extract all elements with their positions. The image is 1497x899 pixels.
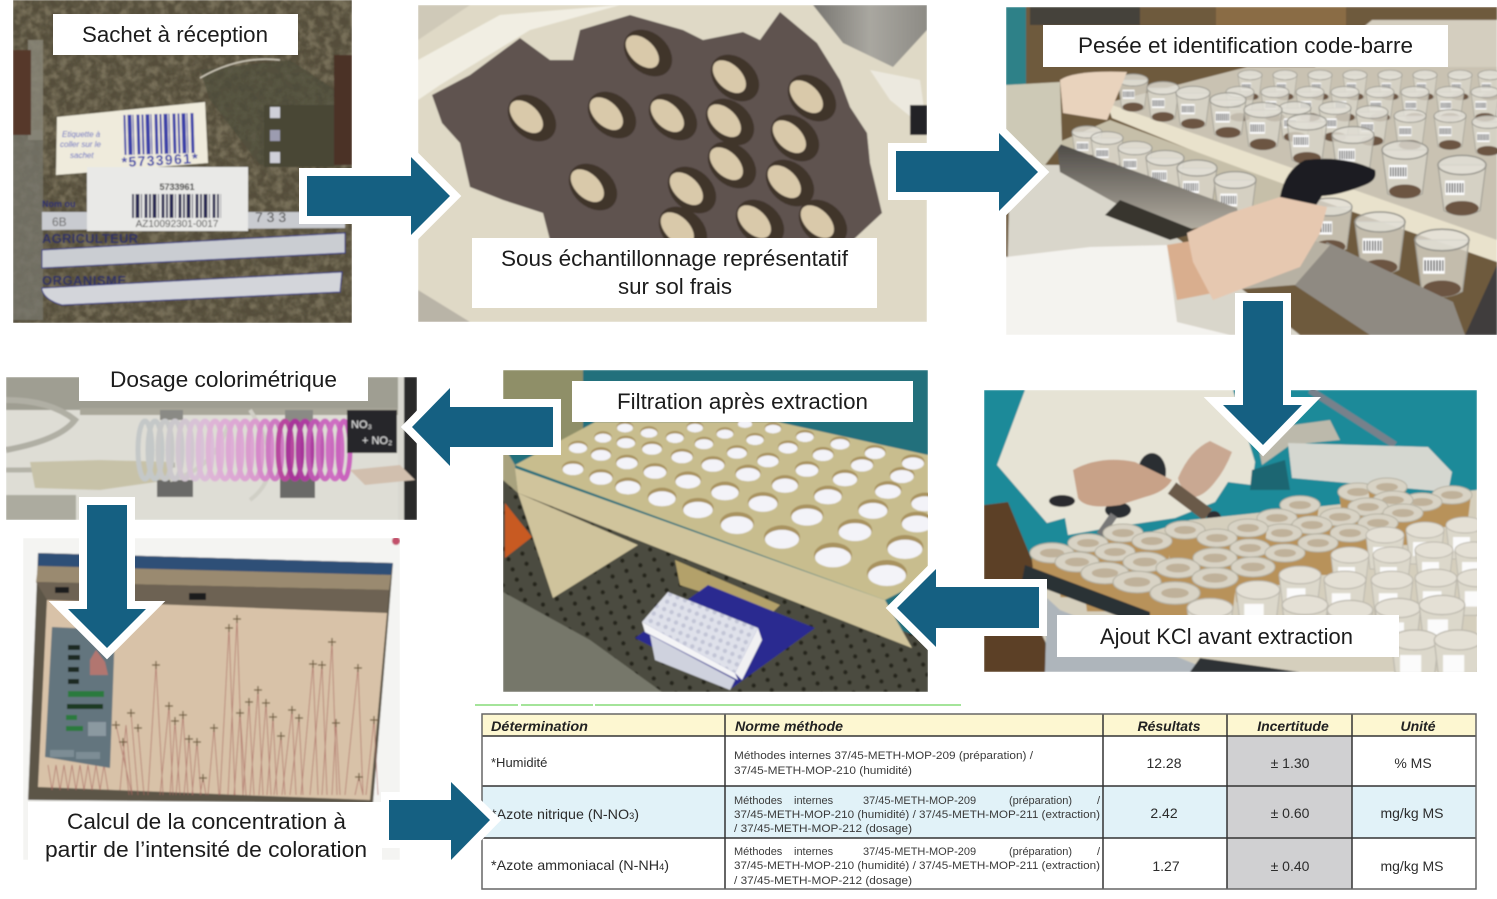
arrow: dosage to calcul [68, 505, 146, 648]
row: humidité: Méthodes internes 37/45-METH-MOP-209 (préparation) / [734, 750, 1034, 762]
row: azote nitrique: Méthodes [734, 795, 783, 807]
row: humidité: ± 1.30 [1271, 755, 1310, 771]
row: azote ammoniacal: 37/45-METH-MOP-210 (humidité) / 37/45-METH-MOP-211 (extraction) [734, 860, 1100, 872]
label: sachet à réception: Sachet à réception [82, 22, 268, 47]
label: calcul de la concentration: Calcul de la concentration à [67, 809, 347, 834]
label: dosage colorimétrique: Dosage colorimétrique [110, 367, 337, 392]
panel: dosage colorimétrique photo: NO₃ [351, 419, 372, 431]
row: humidité: 37/45-METH-MOP-210 (humidité) [734, 765, 912, 777]
green line above table [475, 704, 961, 706]
panel: sachet photo: ORGANISME [42, 273, 126, 288]
label: sous échantillonnage: Sous échantillonnage représentatif [501, 246, 849, 271]
row: azote ammoniacal: *Azote ammoniacal (N-NH 4) [491, 857, 669, 873]
label: filtration: Filtration après extraction [617, 389, 868, 414]
row: azote nitrique: *Azote nitrique (N-NO 3) [491, 806, 639, 822]
panel: sous-échantillonnage photo [418, 5, 927, 322]
panel: ajout KCl photo [984, 390, 1497, 682]
row: azote nitrique: mg/kg MS [1380, 805, 1444, 821]
row: azote nitrique [491, 795, 1444, 835]
panel: sachet photo: 6B [52, 215, 67, 229]
arrow: pesée to ajout KCl [1223, 301, 1302, 445]
panel: sachet photo [13, 0, 352, 323]
label: dosage colorimétrique [79, 365, 368, 401]
row: humidité: % MS [1394, 755, 1432, 771]
label: filtration [572, 381, 913, 422]
panel: sachet photo: AZ10092301-0017 [136, 219, 219, 230]
table header: Incertitude [1257, 718, 1329, 734]
panel: sachet photo: Nom ou [42, 199, 76, 209]
label: pesée: Pesée et identification code-barre [1078, 33, 1413, 58]
row: azote nitrique: internes [794, 795, 834, 807]
panel: écran calcul photo [23, 537, 400, 860]
panel: sachet photo: AGRICULTEUR [42, 231, 139, 246]
row: humidité: 12.28 [1146, 755, 1182, 771]
arrow: sous-échantillonnage to pesée [896, 133, 1038, 211]
label: ajout KCl [1057, 615, 1399, 657]
row: humidité: *Humidité [491, 755, 547, 770]
arrow: filtration to dosage [412, 388, 553, 466]
panel: filtration photo [503, 370, 939, 692]
panel: sachet photo: 5733961 [159, 182, 195, 192]
table header: Résultats [1137, 718, 1201, 734]
panel: sachet photo: *5733961* [121, 150, 199, 170]
table header: Unité [1400, 718, 1436, 734]
label: sous échantillonnage: sur sol frais [618, 274, 732, 299]
table: résultats [482, 714, 1476, 889]
row: azote nitrique: ± 0.60 [1271, 805, 1310, 821]
row: azote ammoniacal: / [1097, 846, 1101, 858]
table header: Norme méthode [735, 718, 843, 734]
label: calcul de la concentration [28, 802, 382, 862]
row: azote ammoniacal: (préparation) [1009, 846, 1072, 858]
row: azote nitrique: / [1097, 795, 1101, 807]
row: humidité [491, 750, 1432, 777]
label: calcul de la concentration: partir de l’intensité de coloration [45, 837, 367, 862]
label: ajout KCl: Ajout KCl avant extraction [1100, 624, 1353, 649]
row: azote ammoniacal [491, 846, 1444, 887]
row: azote nitrique: / 37/45-METH-MOP-212 (dosage) [734, 823, 912, 835]
panel: dosage colorimétrique photo [6, 377, 417, 520]
arrow: ajout KCl to filtration [897, 569, 1039, 647]
row: azote ammoniacal: ± 0.40 [1271, 858, 1310, 874]
row: azote nitrique: (préparation) [1009, 795, 1072, 807]
row: azote ammoniacal: 37/45-METH-MOP-209 [863, 846, 976, 858]
row: azote nitrique: 37/45-METH-MOP-209 [863, 795, 976, 807]
table header: Détermination [491, 718, 588, 734]
label: pesée [1043, 25, 1448, 67]
row: azote nitrique: 2.42 [1150, 805, 1178, 821]
panel: sachet photo: sachet [70, 151, 94, 160]
label: sachet à réception [53, 14, 298, 55]
row: azote ammoniacal: 1.27 [1152, 858, 1180, 874]
arrow: calcul to table [389, 782, 490, 860]
panel: pesée photo [1006, 7, 1497, 335]
panel: sachet photo: 7 3 3 [255, 209, 286, 225]
row: azote ammoniacal: mg/kg MS [1380, 858, 1444, 874]
table header [491, 718, 1436, 734]
arrow: sachet to sous-échantillonnage [307, 157, 450, 235]
panel: dosage colorimétrique photo: + NO₂ [362, 435, 392, 447]
panel: sachet photo: Etiquette à [62, 130, 101, 139]
row: azote ammoniacal: / 37/45-METH-MOP-212 (dosage) [734, 875, 912, 887]
row: azote ammoniacal: Méthodes [734, 846, 783, 858]
panel: sachet photo: coller sur le [60, 140, 101, 149]
row: azote ammoniacal: internes [794, 846, 834, 858]
label: sous échantillonnage [472, 238, 877, 308]
row: azote nitrique: 37/45-METH-MOP-210 (humidité) / 37/45-METH-MOP-211 (extraction) [734, 809, 1100, 821]
